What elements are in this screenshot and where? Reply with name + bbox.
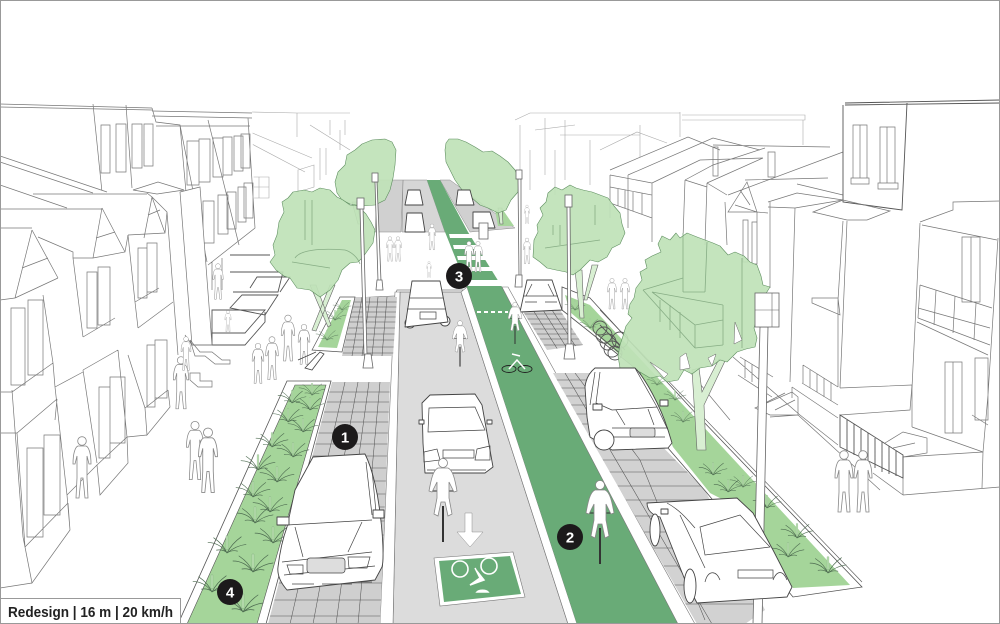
plants far planter xyxy=(316,302,351,340)
right parking pavers far xyxy=(524,310,583,350)
street lamps xyxy=(357,170,575,368)
building: right tower block xyxy=(812,100,1000,487)
plaza edge lines xyxy=(353,290,463,298)
car 4 right SUV xyxy=(585,368,672,450)
tree left xyxy=(270,188,375,331)
badge 3: 3 xyxy=(455,268,463,286)
building: left rear block xyxy=(0,104,255,290)
left parking pavers near xyxy=(268,382,390,623)
far right planter patch xyxy=(495,210,514,226)
car 3 top front xyxy=(405,281,450,328)
caption box xyxy=(0,598,180,624)
planter left far xyxy=(312,297,355,352)
bench xyxy=(298,352,324,370)
plants right planter xyxy=(565,301,846,573)
white lane edge right xyxy=(502,287,695,624)
tree far right cluster xyxy=(445,139,519,224)
badge 2 xyxy=(557,524,583,550)
plaza raised planters xyxy=(212,255,290,345)
far left pavers xyxy=(375,180,403,232)
building: left front terrace xyxy=(0,156,180,588)
planter right xyxy=(562,287,862,597)
white left road edge xyxy=(380,292,400,624)
car 6 right far xyxy=(520,280,562,312)
tree right near xyxy=(618,233,770,450)
far cars xyxy=(405,190,495,232)
pedestrians crossing and far xyxy=(386,205,630,309)
buildings: far left xyxy=(250,112,350,198)
far green bike lane xyxy=(427,180,468,232)
near lamp xyxy=(753,293,779,624)
badge 1: 1 xyxy=(341,430,349,446)
trash bin xyxy=(479,223,488,239)
badge 3 xyxy=(446,263,472,289)
cyclist bike lane near xyxy=(586,480,614,564)
building: left pier xyxy=(133,182,212,345)
main road lane xyxy=(393,292,568,624)
road marking: arrow xyxy=(457,513,483,547)
bikes at rack xyxy=(593,321,628,360)
far road xyxy=(402,180,445,232)
bike lane dashes xyxy=(477,311,508,313)
buildings: far right rear xyxy=(515,112,805,195)
raised crossing green xyxy=(445,232,502,287)
badge 1 xyxy=(332,424,358,450)
far right pavers xyxy=(440,180,515,232)
green bike lane xyxy=(467,287,678,624)
badge 4: 4 xyxy=(226,584,235,602)
cyclist road far xyxy=(452,321,468,367)
badge 2: 2 xyxy=(566,530,574,546)
tree far left xyxy=(335,139,396,224)
crosswalk stripes xyxy=(449,234,503,286)
plaza steps xyxy=(185,335,230,387)
caption box: Redesign | 16 m | 20 km/h xyxy=(8,605,173,621)
planter 4 left near xyxy=(178,381,331,624)
pedestrians right couple xyxy=(835,451,872,512)
right porch and steps xyxy=(680,357,880,490)
right parking pavers near xyxy=(540,373,770,624)
left parking pavers far xyxy=(342,297,397,356)
car 1 SUV left xyxy=(277,454,384,590)
building: far right front with balcony xyxy=(840,201,1000,495)
buildings: right middle row xyxy=(610,137,843,388)
car 5 right lower xyxy=(647,498,792,603)
badge 4 xyxy=(217,579,243,605)
bike lane symbol xyxy=(502,354,532,372)
car 2 middle xyxy=(419,394,493,473)
cyclist road near xyxy=(429,458,457,542)
road marking: bike box xyxy=(434,552,525,606)
white lane buffer xyxy=(461,287,577,624)
pedestrian group left xyxy=(73,264,310,498)
tree right mid xyxy=(533,185,625,318)
cyclist bike lane mid xyxy=(508,302,522,344)
plants left planter xyxy=(193,383,325,612)
